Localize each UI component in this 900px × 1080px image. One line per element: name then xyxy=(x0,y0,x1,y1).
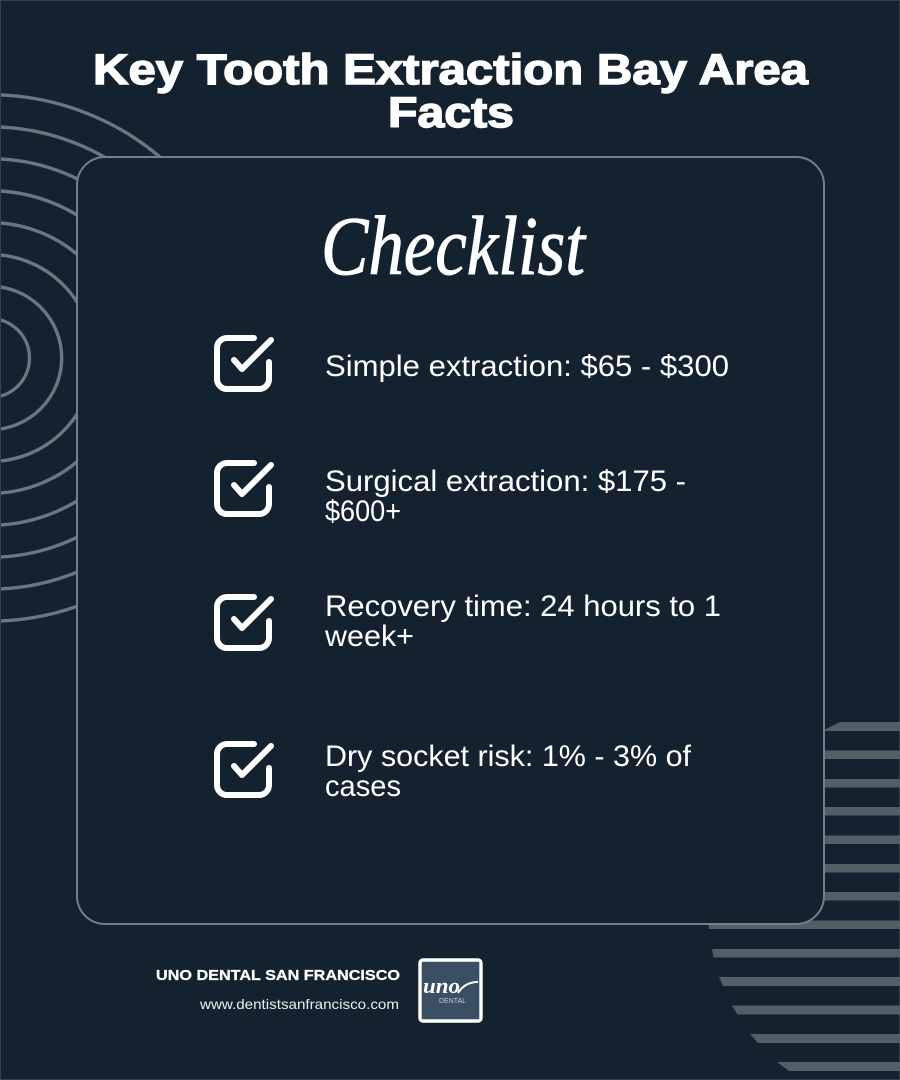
item: surgical extraction: Surgical extraction: $175 - xyxy=(325,465,686,498)
checklist heading: Checklist xyxy=(321,200,587,293)
icon: checkbox xyxy=(217,463,271,514)
footer brand name: UNO DENTAL SAN FRANCISCO xyxy=(156,967,400,984)
item: recovery time: week+ xyxy=(324,620,414,653)
item: simple extraction: Simple extraction: $65 - $300 xyxy=(325,350,729,383)
icon: checkbox xyxy=(217,744,271,795)
item: dry socket risk xyxy=(217,740,692,803)
item: dry socket risk: cases xyxy=(325,770,401,803)
panel: checklist card xyxy=(77,157,824,924)
icon: checkbox xyxy=(217,338,271,389)
item: recovery time: Recovery time: 24 hours to 1 xyxy=(325,590,721,623)
footer website: www.dentistsanfrancisco.com xyxy=(199,996,399,1012)
item: simple extraction xyxy=(217,338,729,389)
logo: uno xyxy=(423,973,460,998)
logo: DENTAL xyxy=(439,998,466,1005)
item: recovery time xyxy=(217,590,721,653)
striped semicircle decoration xyxy=(708,722,900,1071)
title xyxy=(93,46,809,137)
item: surgical extraction: $600+ xyxy=(325,495,401,528)
logo xyxy=(420,960,481,1021)
item: surgical extraction xyxy=(217,463,686,528)
title: Facts xyxy=(388,89,514,137)
concentric rings decoration xyxy=(0,95,253,621)
icon: checkbox xyxy=(217,597,271,648)
item: dry socket risk: Dry socket risk: 1% - 3% of xyxy=(325,740,692,773)
title: Key Tooth Extraction Bay Area xyxy=(93,46,809,94)
